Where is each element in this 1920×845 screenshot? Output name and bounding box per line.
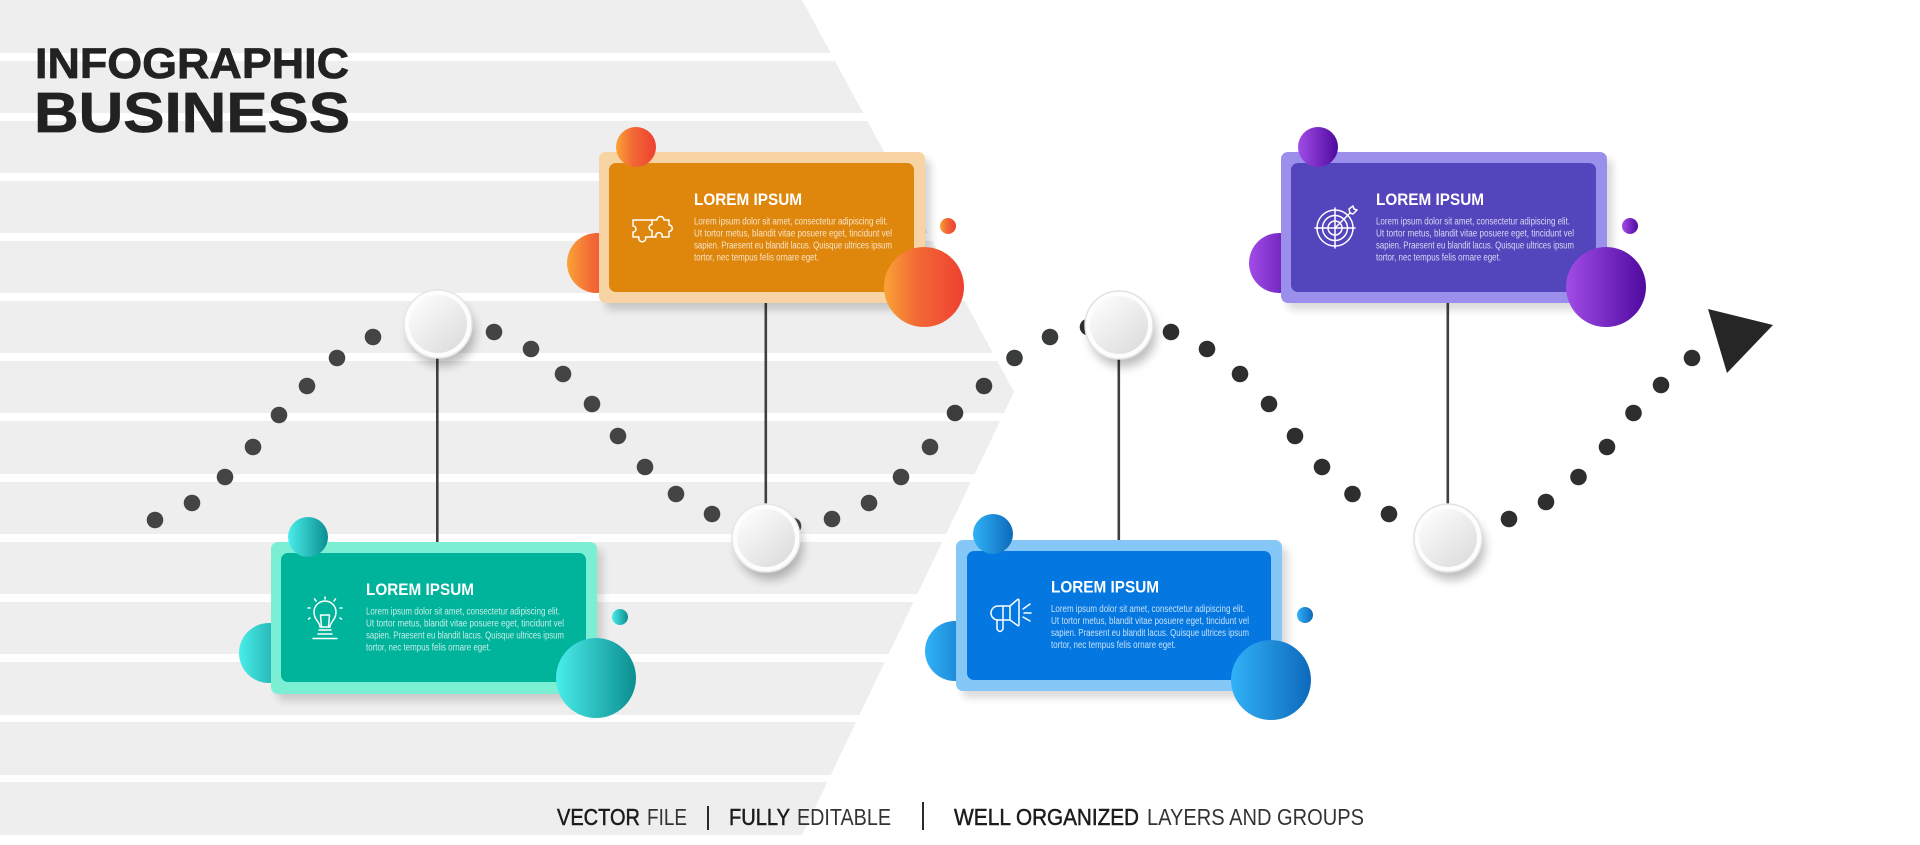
- text block: [694, 216, 892, 264]
- heading: LOREM IPSUM: [694, 190, 802, 209]
- connector line 4: [1446, 300, 1449, 505]
- text block: sapien. Praesent eu blandit lacus. Quisque ultrices ipsum: [694, 240, 892, 252]
- text block: tortor, nec tempus felis ornare eget.: [1376, 252, 1501, 264]
- footer caption: ORGANIZED: [1016, 804, 1139, 830]
- node circle 3: [1085, 291, 1156, 367]
- panel: green card: [239, 517, 636, 718]
- text block: Lorem ipsum dolor sit amet, consectetur adipiscing elit.: [694, 216, 888, 228]
- text block: tortor, nec tempus felis ornare eget.: [366, 642, 491, 654]
- text block: Lorem ipsum dolor sit amet, consectetur adipiscing elit.: [1376, 216, 1570, 228]
- title: INFOGRAPHIC: [35, 40, 349, 88]
- icon: light bulb: [308, 597, 342, 638]
- heading: LOREM IPSUM: [1051, 578, 1159, 596]
- text block: tortor, nec tempus felis ornare eget.: [694, 252, 819, 264]
- footer caption: FILE: [647, 804, 687, 830]
- dotted wave path, left section: [147, 324, 963, 534]
- text block: [366, 606, 564, 654]
- text block: Lorem ipsum dolor sit amet, consectetur adipiscing elit.: [1051, 604, 1245, 615]
- background striped arrow: [0, 0, 1020, 835]
- footer caption: WELL: [954, 804, 1011, 830]
- node circle 1: [404, 290, 475, 366]
- text block: sapien. Praesent eu blandit lacus. Quisque ultrices ipsum: [1376, 240, 1574, 252]
- heading: LOREM IPSUM: [1376, 190, 1484, 209]
- connector line 3: [1118, 350, 1120, 541]
- icon: megaphone: [991, 599, 1031, 632]
- text block: [1376, 216, 1574, 264]
- dotted wave path, right section: [976, 319, 1700, 527]
- text block: sapien. Praesent eu blandit lacus. Quisque ultrices ipsum: [1051, 628, 1249, 639]
- footer caption: VECTOR: [557, 804, 640, 830]
- panel: blue card: [925, 514, 1313, 720]
- heading: LOREM IPSUM: [366, 580, 474, 599]
- title: [34, 40, 350, 145]
- icon: puzzle: [633, 217, 672, 242]
- arrow head: [1708, 309, 1773, 373]
- text block: Ut tortor metus, blandit vitae posuere eget, tincidunt vel: [366, 618, 564, 630]
- icon: target: [1315, 206, 1357, 248]
- text block: [1051, 604, 1249, 651]
- footer caption: FULLY: [729, 804, 790, 830]
- connector line 1: [436, 350, 439, 542]
- footer caption: [557, 802, 1364, 830]
- node circle 4: [1414, 504, 1485, 580]
- footer caption: EDITABLE: [797, 804, 891, 830]
- title: BUSINESS: [34, 81, 350, 145]
- panel: orange card: [567, 127, 964, 327]
- panel: purple card: [1249, 127, 1646, 327]
- text block: Lorem ipsum dolor sit amet, consectetur adipiscing elit.: [366, 606, 560, 618]
- text block: Ut tortor metus, blandit vitae posuere eget, tincidunt vel: [1051, 616, 1249, 627]
- connector line 2: [764, 300, 767, 505]
- node circle 2: [732, 504, 803, 580]
- text block: Ut tortor metus, blandit vitae posuere eget, tincidunt vel: [1376, 228, 1574, 240]
- text block: Ut tortor metus, blandit vitae posuere eget, tincidunt vel: [694, 228, 892, 240]
- footer caption: LAYERS AND GROUPS: [1147, 804, 1364, 830]
- text block: sapien. Praesent eu blandit lacus. Quisque ultrices ipsum: [366, 630, 564, 642]
- text block: tortor, nec tempus felis ornare eget.: [1051, 640, 1176, 651]
